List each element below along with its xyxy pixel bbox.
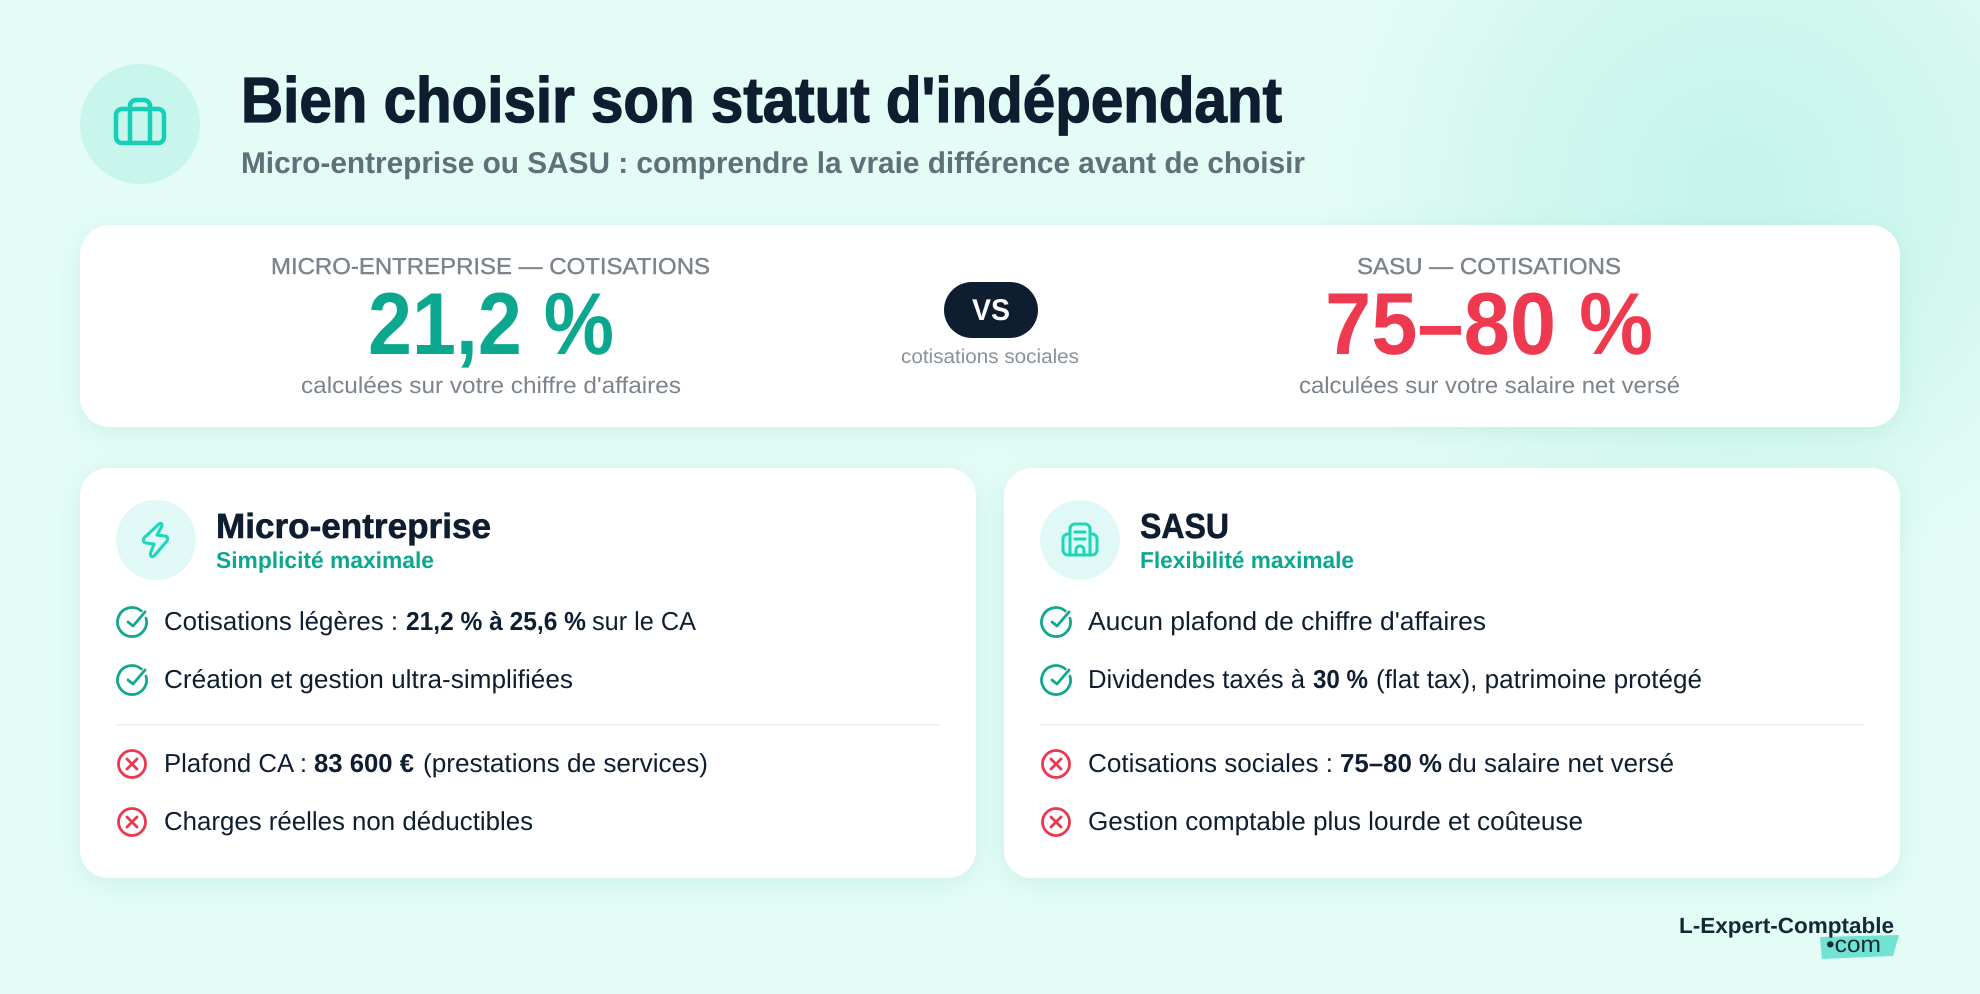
- vs badge: VS: [972, 294, 1010, 327]
- icon: briefcase: [80, 64, 200, 184]
- drawback 1: (prestations de services): [423, 748, 708, 778]
- heading: Micro-entreprise: [216, 507, 491, 546]
- stat: SASU: 75–80 %: [1325, 274, 1653, 373]
- stat: micro-entreprise: [271, 253, 710, 398]
- drawback 1: Plafond CA :: [164, 748, 307, 778]
- advantage 1: Cotisations légères :: [164, 606, 398, 636]
- logo: L-Expert-Comptable.com: L-Expert-Comptable: [1679, 913, 1894, 938]
- advantage 2: [1042, 664, 1702, 695]
- vs badge: [901, 282, 1079, 368]
- panel: micro-entreprise: [80, 468, 976, 878]
- stat: SASU: SASU — COTISATIONS: [1357, 253, 1621, 279]
- advantage 1: Aucun plafond de chiffre d'affaires: [1088, 606, 1486, 636]
- panel: SASU: [1004, 468, 1900, 878]
- drawback 1: 83 600 €: [314, 748, 414, 778]
- drawback 1: [1042, 748, 1674, 778]
- drawback 1: du salaire net versé: [1448, 748, 1674, 778]
- panel: comparison of contributions: [80, 225, 1900, 427]
- drawback 2: Gestion comptable plus lourde et coûteuse: [1088, 806, 1583, 836]
- heading: SASU: [1140, 507, 1229, 546]
- icon: lightning bolt: [116, 500, 196, 580]
- drawback 2: Charges réelles non déductibles: [164, 806, 533, 836]
- tagline: Flexibilité maximale: [1140, 547, 1354, 573]
- logo: L-Expert-Comptable.com: •com: [1826, 931, 1881, 957]
- stat: micro-entreprise: calculées sur votre chiffre d'affaires: [301, 372, 681, 398]
- drawback 1: 75–80 %: [1340, 748, 1442, 778]
- logo: L-Expert-Comptable.com: [1679, 913, 1899, 959]
- stat: SASU: calculées sur votre salaire net versé: [1299, 372, 1680, 398]
- icon: building: [1040, 500, 1120, 580]
- vs badge: cotisations sociales: [901, 346, 1079, 368]
- subtitle: Micro-entreprise ou SASU : comprendre la vraie différence avant de choisir: [241, 147, 1305, 180]
- advantage 2: 30 %: [1313, 664, 1368, 694]
- advantage 1: 21,2 % à 25,6 %: [406, 606, 586, 636]
- advantage 2: (flat tax), patrimoine protégé: [1376, 664, 1702, 694]
- drawback 1: Cotisations sociales :: [1088, 748, 1333, 778]
- advantage 2: Dividendes taxés à: [1088, 664, 1306, 694]
- drawback 1: [118, 748, 708, 778]
- title: Bien choisir son statut d'indépendant: [241, 64, 1282, 136]
- advantage 1: [118, 606, 697, 637]
- stat: micro-entreprise: MICRO-ENTREPRISE — COTISATIONS: [271, 253, 710, 279]
- stat: SASU: [1299, 253, 1680, 398]
- stat: micro-entreprise: 21,2 %: [368, 274, 614, 373]
- advantage 2: Création et gestion ultra-simplifiées: [164, 664, 573, 694]
- tagline: Simplicité maximale: [216, 547, 434, 573]
- advantage 1: sur le CA: [592, 606, 697, 636]
